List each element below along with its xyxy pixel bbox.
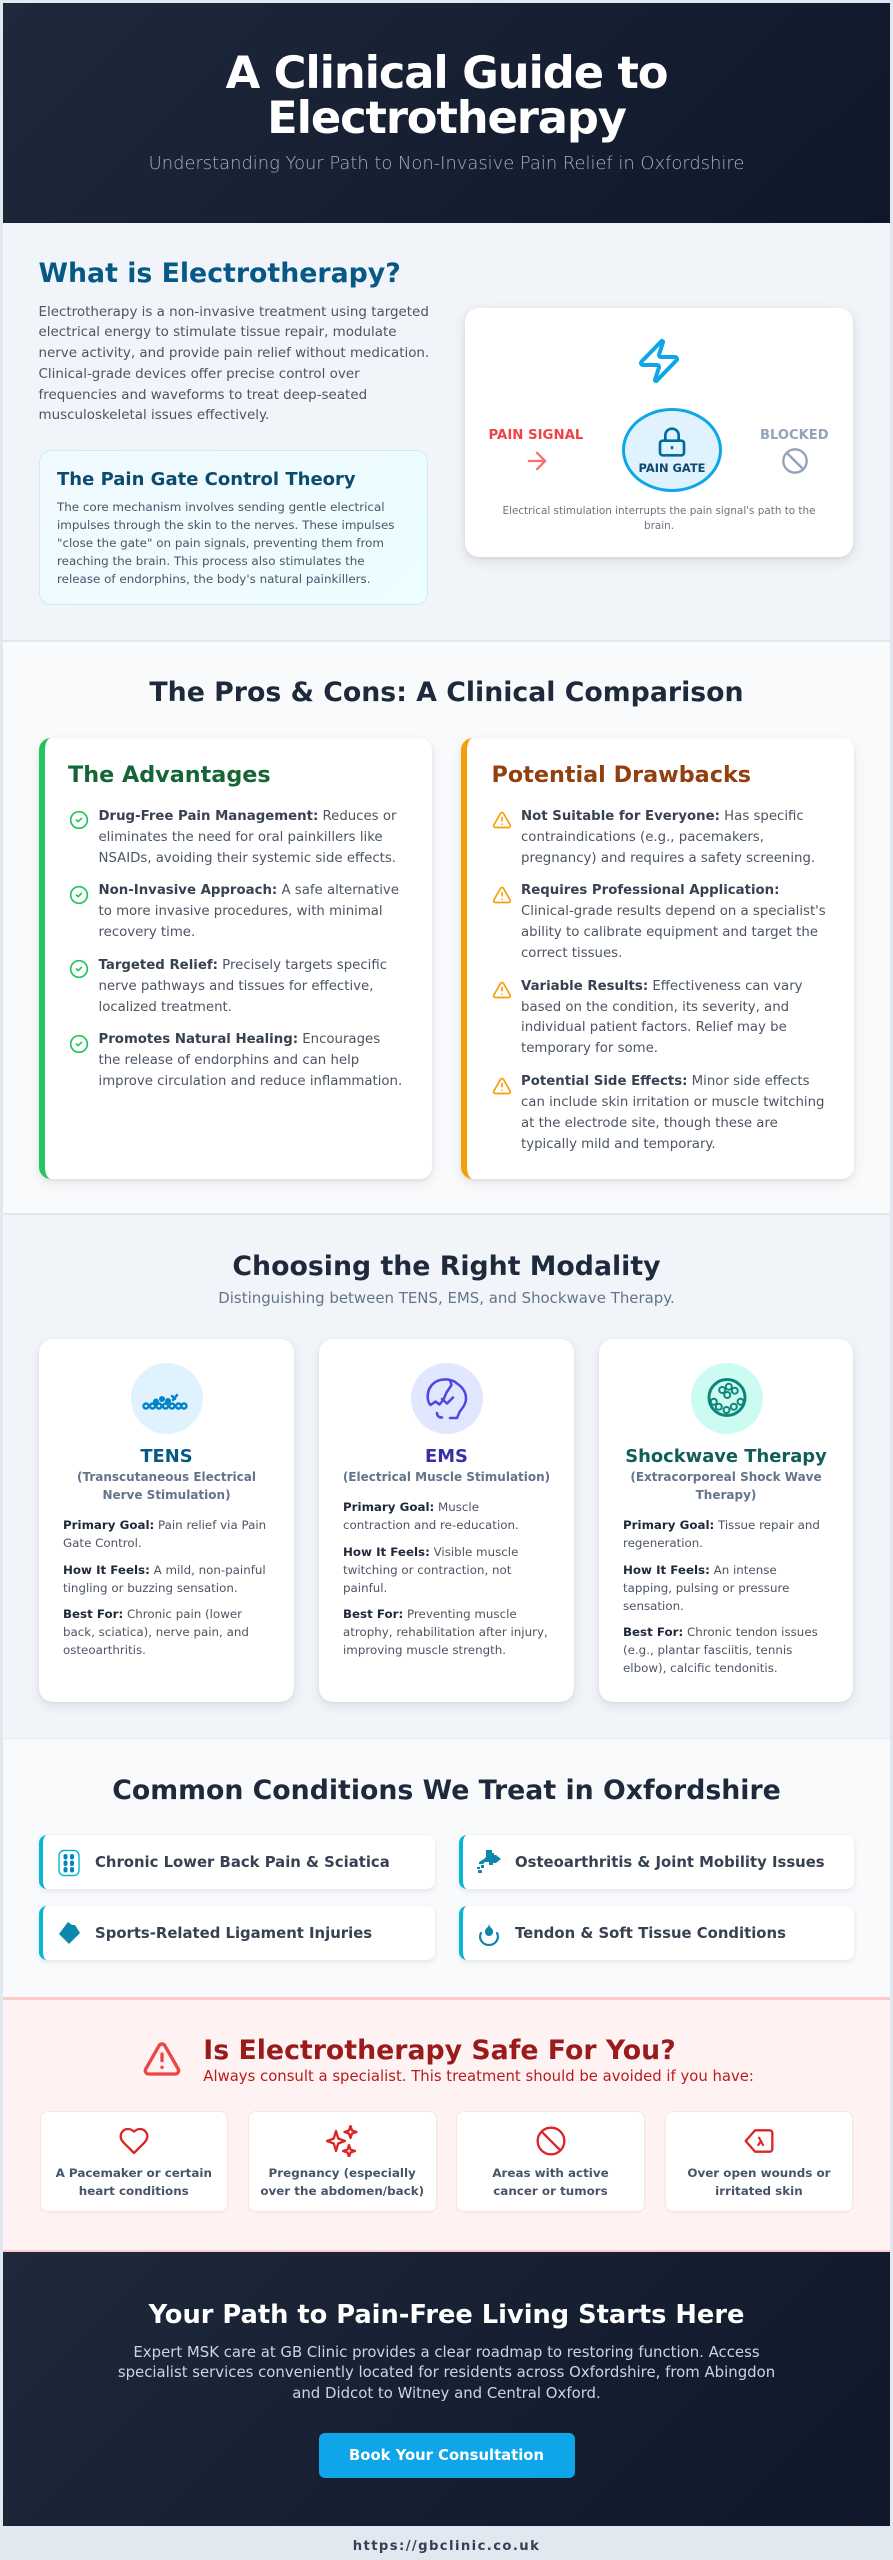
shockwave how it feels: sensation. — [623, 1598, 684, 1612]
shockwave best for — [623, 1625, 818, 1675]
text block: definition: electrical energy to stimulate tissue repair, modulate — [38, 325, 397, 340]
advantages heading: The Advantages — [68, 762, 271, 788]
TENS how it feels — [63, 1563, 266, 1595]
contraindication: pacemaker — [40, 2111, 228, 2212]
text: irritated skin — [715, 2184, 803, 2198]
EMS title: EMS — [425, 1446, 468, 1467]
icon: blocked — [782, 448, 808, 474]
panel: safety — [3, 1997, 890, 2252]
TENS best for: Best For: Chronic pain (lower — [63, 1607, 242, 1621]
text: cancer or tumors — [493, 2184, 608, 2198]
drawback item: side effects: can include skin irritation or muscle twitching — [521, 1095, 824, 1110]
label: pain signal: PAIN SIGNAL — [488, 428, 583, 442]
icon: TENS — [130, 1363, 202, 1434]
TENS best for — [63, 1607, 249, 1657]
advantage item: drug-free: NSAIDs, avoiding their systemic side effects. — [98, 850, 396, 866]
text: Over open wounds or — [687, 2166, 830, 2180]
advantage item: non-invasive — [70, 883, 399, 940]
TENS full name: Nerve Stimulation) — [102, 1488, 231, 1502]
text block: definition: musculoskeletal issues effectively. — [38, 408, 269, 423]
advantage item: non-invasive: to more invasive procedures, with minimal — [98, 904, 383, 919]
panel: common conditions — [3, 1738, 890, 1997]
advantage item: natural healing: the release of endorphins and can help — [98, 1053, 359, 1068]
text block: definition: nerve activity, and provide pain relief without medication. — [38, 346, 429, 361]
text: A Pacemaker or certain — [56, 2166, 212, 2180]
condition: ligament injuries — [39, 1906, 434, 1960]
drawback item: professional application: Requires Professional Application: — [521, 883, 779, 898]
arrow: pain signal — [528, 452, 546, 470]
advantage item: drug-free — [70, 809, 396, 866]
drawback item: professional application: Clinical-grade results depend on a specialist's — [521, 904, 826, 919]
panel: what is electrotherapy — [3, 223, 890, 640]
EMS full name: (Electrical Muscle Stimulation) — [343, 1470, 550, 1484]
subheading: modality: Distinguishing between TENS, EMS, and Shockwave Therapy. — [218, 1289, 675, 1307]
callout text — [56, 500, 394, 586]
text — [260, 2166, 424, 2198]
heading: modality: Choosing the Right Modality — [232, 1250, 661, 1282]
title: A Clinical Guide to — [226, 46, 667, 99]
advantage item: non-invasive: recovery time. — [98, 925, 195, 940]
shockwave best for: (e.g., plantar fasciitis, tennis — [623, 1643, 792, 1657]
EMS best for: Best For: Preventing muscle — [343, 1607, 517, 1621]
callout heading: The Pain Gate Control Theory — [57, 469, 356, 490]
condition text: Osteoarthritis & Joint Mobility Issues — [515, 1853, 825, 1871]
condition text: Sports-Related Ligament Injuries — [95, 1924, 372, 1942]
EMS how it feels: twitching or contraction, not — [343, 1563, 511, 1577]
icon: EMS — [410, 1363, 482, 1434]
shockwave primary goal — [623, 1518, 820, 1550]
text block: definition: Electrotherapy is a non-invasive treatment using targeted — [38, 304, 429, 320]
icon: lock — [658, 427, 686, 457]
condition: tendon — [458, 1906, 854, 1960]
text — [492, 2166, 609, 2198]
drawback item: variable results — [492, 979, 803, 1056]
text block: definition: Clinical-grade devices offer precise control over — [38, 367, 360, 382]
text block: call to action — [3, 2342, 890, 2404]
text block: call to action: and Didcot to Witney and Central Oxford. — [292, 2384, 601, 2402]
condition text: Tendon & Soft Tissue Conditions — [515, 1924, 786, 1942]
drawback item: professional application: ability to calibrate equipment and target the — [521, 925, 818, 940]
drawback item: not suitable: contraindications (e.g., pacemakers, — [521, 830, 764, 845]
panel: drawbacks: temporary for some. — [521, 1041, 658, 1056]
icon: tendon — [478, 1924, 500, 1946]
panel: call to action — [3, 2252, 890, 2526]
EMS how it feels — [343, 1545, 518, 1594]
title — [226, 46, 667, 144]
callout text: impulses through the skin to the nerves. These impulses — [57, 518, 394, 532]
shockwave how it feels: How It Feels: An intense — [623, 1563, 777, 1577]
icon: joint — [477, 1850, 501, 1873]
heading: call to action: Your Path to Pain-Free Living Starts Here — [149, 2300, 744, 2330]
diagram caption: Electrical stimulation interrupts the pain signal's path to the — [502, 505, 816, 517]
label: pain gate: PAIN GATE — [639, 461, 705, 475]
text: over the abdomen/back) — [260, 2184, 424, 2198]
condition: osteoarthritis — [458, 1835, 854, 1889]
panel: drawbacks: correct tissues. — [521, 946, 622, 961]
drawback item: variable results: individual patient factors. Relief may be — [521, 1020, 787, 1035]
TENS best for: back, sciatica), nerve pain, and — [63, 1625, 249, 1639]
text: Pregnancy (especially — [269, 2166, 416, 2180]
drawback item: professional application — [492, 883, 826, 961]
heading: pros and cons: The Pros & Cons: A Clinical Comparison — [149, 677, 744, 708]
drawback item: variable results: Variable Results: Effectiveness can vary — [521, 979, 803, 994]
advantage item: natural healing — [70, 1032, 402, 1089]
shockwave full name — [630, 1470, 822, 1502]
subheading: safety: Always consult a specialist. This treatment should be avoided if you have: — [203, 2067, 754, 2085]
EMS best for: atrophy, rehabilitation after injury, — [343, 1625, 548, 1639]
diagram caption — [502, 505, 816, 532]
header banner — [3, 3, 890, 223]
shockwave title: Shockwave Therapy — [625, 1446, 827, 1467]
advantage item: targeted relief — [70, 958, 387, 1014]
icon: heart — [120, 2128, 148, 2154]
panel: drawbacks — [461, 738, 854, 1179]
card: TENS — [39, 1339, 294, 1702]
drawback item: side effects: Potential Side Effects: Minor side effects — [521, 1074, 810, 1089]
TENS primary goal: Primary Goal: Pain relief via Pain — [63, 1518, 266, 1532]
advantage item: natural healing: Promotes Natural Healing: Encourages — [98, 1032, 380, 1047]
shockwave primary goal: regeneration. — [623, 1536, 703, 1550]
EMS how it feels: painful. — [343, 1580, 387, 1594]
button: book consultation: Book Your Consultation — [349, 2447, 544, 2464]
shockwave best for: elbow), calcific tendonitis. — [623, 1661, 778, 1675]
diagram: pain gate — [465, 308, 853, 557]
EMS how it feels: How It Feels: Visible muscle — [343, 1545, 518, 1559]
EMS best for: improving muscle strength. — [343, 1643, 506, 1657]
icon: ligament — [59, 1922, 80, 1944]
advantage item: targeted relief: Targeted Relief: Precisely targets specific — [98, 958, 387, 973]
title: Electrotherapy — [267, 91, 626, 144]
drawback item: not suitable — [492, 809, 815, 866]
advantage item: non-invasive: Non-Invasive Approach: A safe alternative — [98, 883, 399, 898]
heading: safety: Is Electrotherapy Safe For You? — [203, 2035, 676, 2066]
drawback item: not suitable: Not Suitable for Everyone: Has specific — [521, 809, 804, 824]
shockwave how it feels — [623, 1563, 789, 1612]
drawback item: side effects — [492, 1074, 824, 1152]
drawback item: not suitable: pregnancy) and requires a safety screening. — [521, 850, 815, 866]
condition: back pain — [39, 1835, 434, 1889]
callout text: "close the gate" on pain signals, preventing them from — [57, 536, 384, 550]
text: Areas with active — [492, 2166, 609, 2180]
text — [56, 2166, 212, 2198]
EMS primary goal: contraction and re-education. — [343, 1518, 519, 1532]
icon: lightning bolt — [638, 338, 680, 384]
diagram caption: brain. — [644, 520, 674, 532]
EMS primary goal: Primary Goal: Muscle — [343, 1500, 479, 1514]
callout text: reaching the brain. This process also stimulates the — [57, 554, 365, 568]
advantage item: drug-free: eliminates the need for oral painkillers like — [98, 830, 383, 845]
drawback item: variable results: based on the condition, its severity, and — [521, 1000, 789, 1014]
icon: warning — [144, 2042, 180, 2076]
panel: choosing the right modality — [3, 1213, 890, 1738]
drawback item: side effects: at the electrode site, though these are — [521, 1116, 778, 1131]
shockwave how it feels: tapping, pulsing or pressure — [623, 1581, 789, 1595]
icon: wound tag — [744, 2129, 774, 2153]
panel: advantages — [39, 738, 432, 1179]
advantage item: natural healing: improve circulation and reduce inflammation. — [98, 1074, 402, 1089]
contraindication: pregnancy — [248, 2111, 437, 2212]
contraindication: wounds — [665, 2111, 853, 2212]
icon: shockwave — [690, 1363, 762, 1434]
card: EMS — [319, 1339, 574, 1702]
TENS how it feels: How It Feels: A mild, non-painful — [63, 1563, 266, 1577]
drawbacks heading: Potential Drawbacks — [492, 762, 751, 788]
subtitle: Understanding Your Path to Non-Invasive Pain Relief in Oxfordshire — [149, 153, 744, 174]
callout: pain gate control theory — [39, 450, 428, 605]
heading: conditions: Common Conditions We Treat in Oxfordshire — [112, 1774, 781, 1806]
shockwave full name: Therapy) — [696, 1488, 756, 1502]
callout text: The core mechanism involves sending gentle electrical — [57, 500, 385, 514]
contraindication: cancer — [456, 2111, 645, 2212]
text: heart conditions — [79, 2184, 189, 2198]
icon: sparkles — [326, 2125, 358, 2157]
TENS title: TENS — [140, 1446, 193, 1467]
TENS full name — [77, 1470, 256, 1502]
TENS best for: osteoarthritis. — [63, 1643, 146, 1657]
condition text: Chronic Lower Back Pain & Sciatica — [95, 1853, 390, 1871]
footer url: https://gbclinic.co.uk — [353, 2539, 540, 2554]
button: book consultation — [318, 2433, 574, 2478]
TENS full name: (Transcutaneous Electrical — [77, 1470, 256, 1484]
text block: call to action: Expert MSK care at GB Clinic provides a clear roadmap to restoring function. Access — [133, 2343, 760, 2361]
shockwave primary goal: Primary Goal: Tissue repair and — [623, 1518, 820, 1532]
text block: call to action: specialist services conveniently located for residents across Oxfordshire, from Abingdon — [118, 2363, 775, 2381]
text block: definition — [38, 304, 429, 423]
TENS primary goal: Gate Control. — [63, 1536, 142, 1550]
EMS primary goal — [343, 1500, 519, 1532]
TENS primary goal — [63, 1518, 266, 1550]
icon: prohibited — [536, 2126, 566, 2156]
pain gate circle — [622, 408, 722, 492]
EMS best for — [343, 1607, 548, 1657]
shockwave full name: (Extracorporeal Shock Wave — [630, 1470, 822, 1484]
label: blocked: BLOCKED — [760, 428, 829, 442]
panel: pros and cons — [3, 640, 890, 1213]
text — [687, 2166, 830, 2198]
text block: definition: frequencies and waveforms to treat deep-seated — [38, 388, 367, 403]
icon: spine — [58, 1850, 80, 1876]
advantage item: targeted relief: localized treatment. — [98, 1000, 232, 1014]
card: shockwave — [599, 1339, 853, 1702]
advantage item: targeted relief: nerve pathways and tissues for effective, — [98, 979, 373, 994]
TENS how it feels: tingling or buzzing sensation. — [63, 1581, 238, 1595]
advantage item: drug-free: Drug-Free Pain Management: Reduces or — [98, 809, 396, 824]
heading: what is electrotherapy: What is Electrotherapy? — [38, 258, 401, 289]
panel: drawbacks: typically mild and temporary. — [521, 1137, 716, 1152]
callout text: release of endorphins, the body's natural painkillers. — [57, 572, 370, 586]
shockwave best for: Best For: Chronic tendon issues — [623, 1625, 818, 1639]
